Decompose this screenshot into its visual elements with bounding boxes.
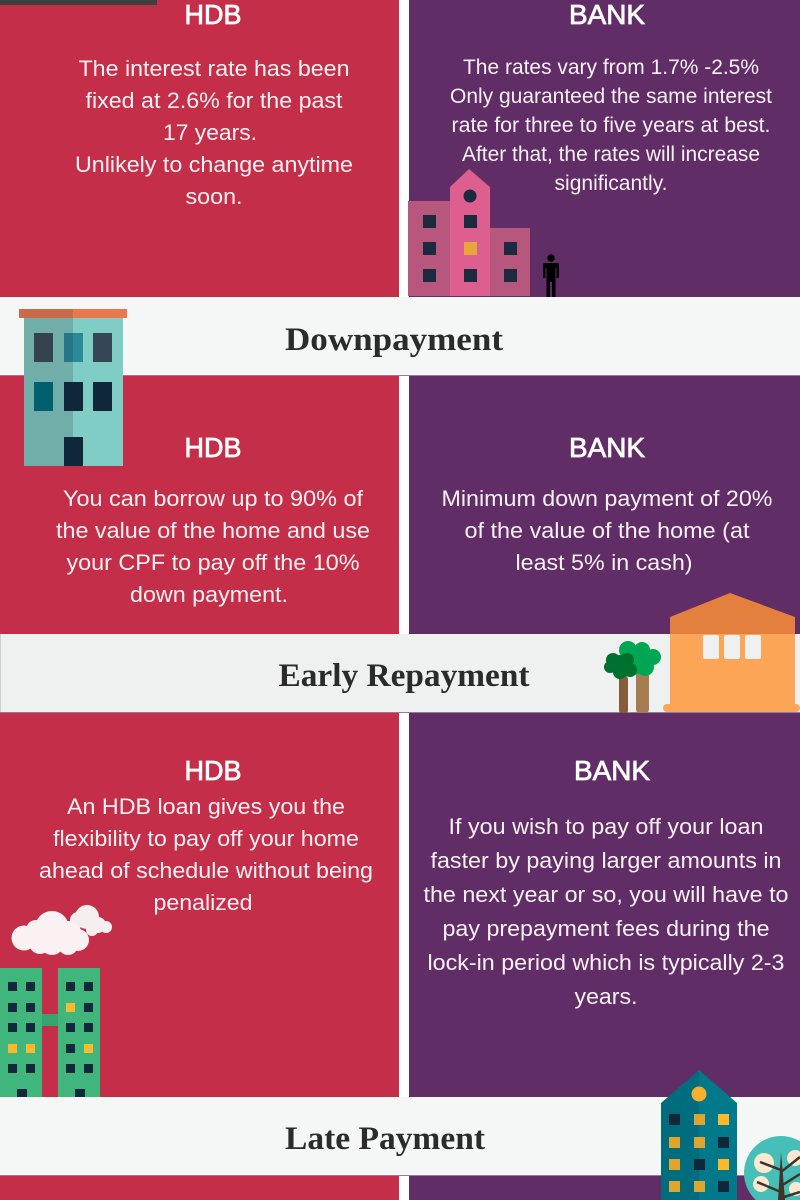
text: HDB interest rate: Unlikely to change anytime (75, 152, 353, 177)
heading: Downpayment: Downpayment (285, 322, 503, 358)
text: HDB downpayment: your CPF to pay off the 10% (66, 550, 360, 575)
text: bank downpayment: of the value of the home (at (464, 518, 750, 543)
panel: late payment HDB (0, 1176, 399, 1200)
text: HDB early repayment: ahead of schedule without being (39, 858, 373, 883)
heading: BANK downpayment: BANK (569, 432, 645, 463)
text: bank interest rate: rate for three to five years at best. (452, 114, 770, 137)
panel: interest rate BANK (408, 0, 800, 297)
text: bank downpayment: Minimum down payment of 20% (442, 486, 772, 511)
text: bank interest rate: The rates vary from 1.7% -2.5% (463, 56, 759, 79)
icon: orange house (663, 593, 800, 712)
panel: late payment BANK (409, 1176, 800, 1200)
text: HDB early repayment (39, 794, 373, 915)
text: HDB early repayment: flexibility to pay off your home (53, 826, 359, 851)
icon: trees (604, 641, 661, 715)
text: HDB early repayment: penalized (154, 890, 252, 915)
icon: pink building (408, 169, 530, 296)
heading: BANK early repayment: BANK (574, 755, 650, 786)
heading: HDB downpayment: HDB (184, 432, 242, 463)
text: bank interest rate (450, 56, 772, 195)
band: Early Repayment (0, 634, 800, 713)
text: HDB downpayment (56, 486, 370, 607)
icon: round teal tree (744, 1136, 800, 1200)
band: Late Payment (0, 1097, 800, 1176)
text: HDB early repayment: An HDB loan gives you the (67, 794, 345, 819)
heading: Early Repayment: Early Repayment (278, 658, 530, 694)
panel: early repayment HDB (0, 713, 399, 1097)
text: HDB downpayment: You can borrow up to 90% of (63, 486, 364, 511)
heading: Late Payment: Late Payment (285, 1121, 485, 1157)
text: bank interest rate: Only guaranteed the same interest (450, 85, 772, 108)
text: HDB interest rate (75, 56, 353, 209)
text: HDB interest rate: 17 years. (163, 120, 257, 145)
text: bank early repayment: If you wish to pay off your loan (448, 814, 764, 839)
icon: green twin towers (0, 968, 100, 1097)
text: HDB downpayment: the value of the home and use (56, 518, 370, 543)
text: HDB interest rate: fixed at 2.6% for the past (86, 88, 343, 113)
panel: downpayment BANK (409, 376, 800, 634)
panel: early repayment BANK (409, 713, 800, 1097)
icon: person silhouette (543, 254, 559, 297)
dark image fragment at top edge (0, 0, 157, 5)
band: Downpayment (0, 297, 800, 376)
text: bank downpayment: least 5% in cash) (516, 550, 692, 575)
text: bank downpayment (442, 486, 772, 575)
text: bank interest rate: After that, the rates will increase (462, 143, 760, 166)
text: HDB interest rate: soon. (186, 184, 242, 209)
icon: teal apartment building (19, 309, 127, 466)
text: bank early repayment: years. (574, 984, 638, 1009)
text: bank early repayment (424, 814, 788, 1009)
text: bank early repayment: lock-in period which is typically 2-3 (428, 950, 784, 975)
text: bank early repayment: pay prepayment fees during the (442, 916, 770, 941)
text: HDB downpayment: down payment. (130, 582, 288, 607)
heading: HDB early repayment: HDB (184, 755, 242, 786)
text: bank interest rate: significantly. (554, 172, 668, 195)
text: bank early repayment: the next year or so, you will have to (424, 882, 788, 907)
icon: cloud (12, 905, 112, 955)
icon: blue tower (661, 1070, 737, 1200)
panel: downpayment HDB (0, 376, 399, 634)
text: HDB interest rate: The interest rate has been (78, 56, 350, 81)
text: bank early repayment: faster by paying larger amounts in (430, 848, 782, 873)
panel: interest rate HDB (0, 0, 399, 297)
